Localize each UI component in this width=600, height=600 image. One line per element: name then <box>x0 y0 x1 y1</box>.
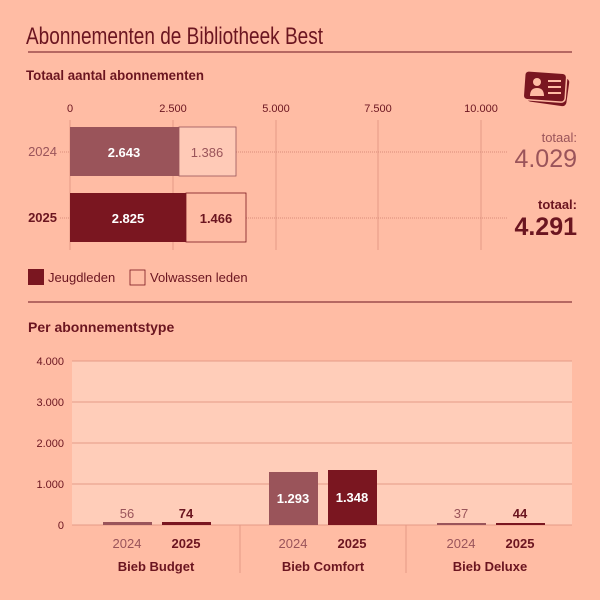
bar 2025: 1.466 <box>200 211 232 226</box>
chart: vertical bars per type: 0 <box>58 520 64 532</box>
legend: Jeugdleden <box>48 270 115 285</box>
title: Abonnementen de Bibliotheek Best <box>26 23 323 50</box>
chart: vertical bars per type: 2025 <box>506 536 534 551</box>
chart: vertical bars per type: 2025 <box>338 536 366 551</box>
chart: horizontal stacked bars: 5.000 <box>262 103 290 115</box>
chart: vertical bars per type: 1.000 <box>36 479 64 491</box>
icon: membership card <box>523 71 570 107</box>
totals: 4.291 <box>514 213 577 241</box>
chart: horizontal stacked bars: 10.000 <box>464 103 498 115</box>
bar 2024 <box>70 127 236 176</box>
chart: horizontal stacked bars: 0 <box>67 103 73 115</box>
chart: horizontal stacked bars <box>28 103 508 250</box>
legend <box>28 269 248 285</box>
chart: vertical bars per type: Bieb Comfort <box>282 559 365 574</box>
heading: per type: Per abonnementstype <box>28 319 174 335</box>
chart: vertical bars per type: 2025 <box>172 536 200 551</box>
bars deluxe: 37 <box>454 506 468 521</box>
chart: vertical bars per type: 2024 <box>279 536 307 551</box>
chart: horizontal stacked bars: 2024 <box>28 144 57 159</box>
chart: vertical bars per type: 2.000 <box>36 438 64 450</box>
heading: totaal: Totaal aantal abonnementen <box>26 67 204 83</box>
chart: horizontal stacked bars: 2.500 <box>159 103 187 115</box>
chart: vertical bars per type: 2024 <box>447 536 475 551</box>
bars comfort <box>269 470 377 525</box>
bars budget: 74 <box>179 506 194 521</box>
bars deluxe <box>437 506 545 525</box>
totals: totaal: <box>542 130 577 145</box>
totals <box>514 130 577 241</box>
chart: vertical bars per type: Bieb Budget <box>118 559 195 574</box>
chart: vertical bars per type: 4.000 <box>36 356 64 368</box>
bar 2024: 1.386 <box>191 145 223 160</box>
totals: 4.029 <box>514 145 577 173</box>
bars comfort: 1.293 <box>277 491 309 506</box>
bars budget: 56 <box>120 506 134 521</box>
totals: totaal: <box>538 197 577 212</box>
legend: Volwassen leden <box>150 270 248 285</box>
bar 2024: 2.643 <box>108 145 140 160</box>
chart: vertical bars per type: 3.000 <box>36 397 64 409</box>
bars deluxe: 44 <box>513 506 528 521</box>
chart: vertical bars per type <box>36 356 572 574</box>
bar 2025: 2.825 <box>112 211 144 226</box>
chart: horizontal stacked bars: 2025 <box>28 210 57 225</box>
bars budget <box>103 506 211 525</box>
bar 2025 <box>70 193 246 242</box>
chart: horizontal stacked bars: 7.500 <box>364 103 392 115</box>
chart: vertical bars per type: Bieb Deluxe <box>453 559 527 574</box>
bars comfort: 1.348 <box>336 490 368 505</box>
chart: vertical bars per type: 2024 <box>113 536 141 551</box>
